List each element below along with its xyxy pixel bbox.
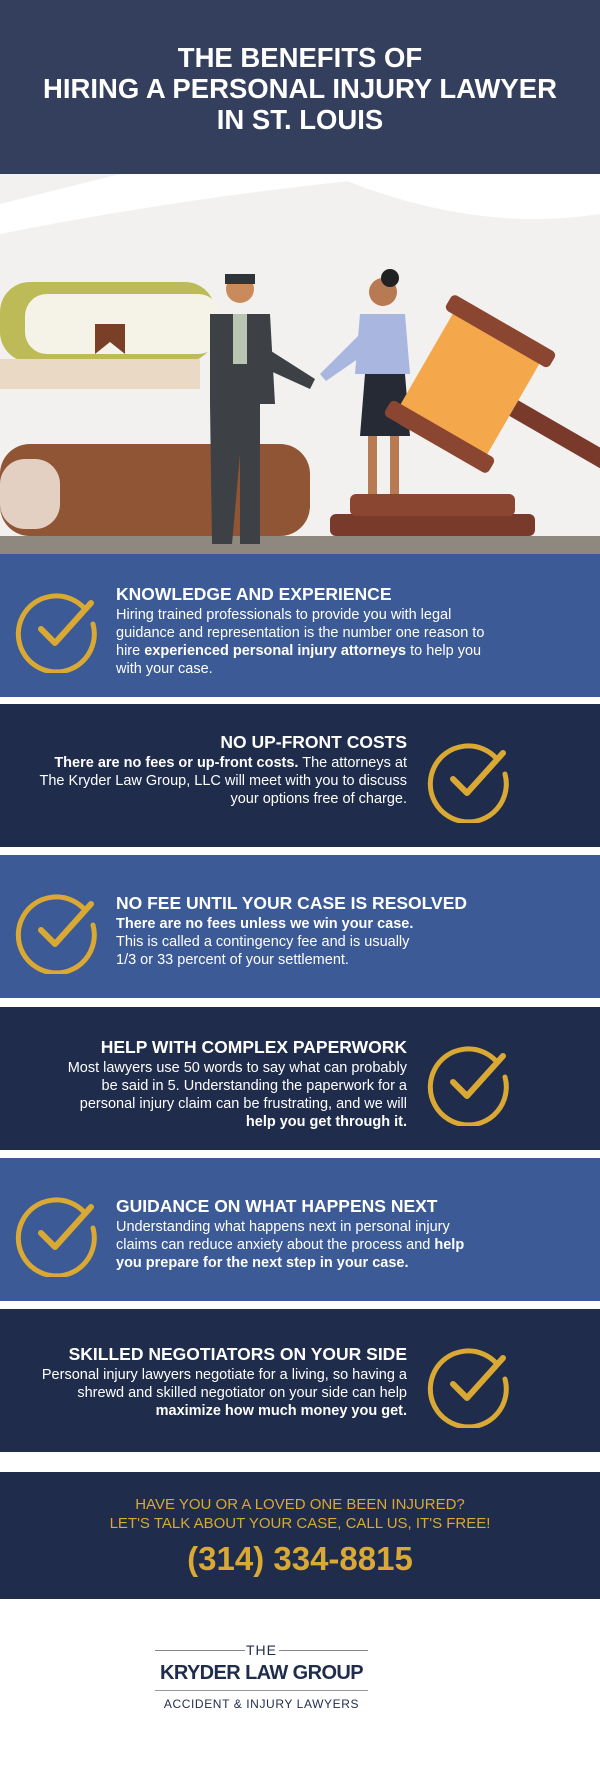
text: The Kryder Law Group, LLC will meet with you to discuss — [40, 773, 407, 789]
text: hire experienced personal injury attorneys to help you — [116, 643, 481, 659]
text: GUIDANCE ON WHAT HAPPENS NEXT — [116, 1196, 438, 1216]
businessman — [210, 274, 315, 544]
text: claims can reduce anxiety about the process and help — [116, 1237, 464, 1253]
illustration — [0, 174, 600, 554]
icon: check — [16, 593, 97, 673]
phone number: (314) 334-8815 — [187, 1540, 413, 1577]
panel: skilled negotiators — [0, 1309, 600, 1452]
panel: no up-front costs — [0, 704, 600, 847]
text — [40, 732, 407, 807]
icon: check — [16, 894, 97, 974]
panel: knowledge and experience — [0, 554, 600, 697]
text — [42, 1344, 407, 1419]
text: NO FEE UNTIL YOUR CASE IS RESOLVED — [116, 893, 467, 913]
businesswoman — [320, 269, 410, 531]
title: THE BENEFITS OF — [178, 42, 422, 73]
text: help you get through it. — [246, 1114, 407, 1130]
text: Most lawyers use 50 words to say what can probably — [68, 1060, 407, 1076]
callout: contact — [0, 1472, 600, 1599]
text: be said in 5. Understanding the paperwork for a — [102, 1078, 407, 1094]
text: you prepare for the next step in your case. — [116, 1255, 408, 1271]
cta text: LET'S TALK ABOUT YOUR CASE, CALL US, IT'S FREE! — [110, 1515, 490, 1532]
text — [116, 893, 467, 968]
text — [116, 584, 484, 677]
text: Hiring trained professionals to provide you with legal — [116, 607, 451, 623]
text: personal injury claim can be frustrating, and we will — [80, 1096, 407, 1112]
panel: complex paperwork — [0, 1007, 600, 1150]
text: Understanding what happens next in personal injury — [116, 1219, 450, 1235]
text: guidance and representation is the number one reason to — [116, 625, 484, 641]
panel: no fee until resolved — [0, 855, 600, 998]
icon: check — [16, 1197, 97, 1277]
logo: KRYDER LAW GROUP — [160, 1662, 363, 1684]
text: with your case. — [116, 661, 213, 677]
text: Personal injury lawyers negotiate for a living, so having a — [42, 1367, 407, 1383]
text: This is called a contingency fee and is usually — [116, 934, 409, 950]
text: There are no fees unless we win your case. — [116, 916, 413, 932]
text: There are no fees or up-front costs. The attorneys at — [54, 755, 407, 771]
text: your options free of charge. — [230, 791, 407, 807]
header — [0, 0, 600, 174]
text: NO UP-FRONT COSTS — [220, 732, 407, 752]
books — [0, 282, 310, 536]
logo — [155, 1642, 368, 1711]
text: SKILLED NEGOTIATORS ON YOUR SIDE — [69, 1344, 407, 1364]
cta text: HAVE YOU OR A LOVED ONE BEEN INJURED? — [135, 1496, 465, 1513]
text: KNOWLEDGE AND EXPERIENCE — [116, 584, 392, 604]
panel: guidance — [0, 1158, 600, 1301]
text: 1/3 or 33 percent of your settlement. — [116, 952, 349, 968]
text: shrewd and skilled negotiator on your side can help — [77, 1385, 407, 1401]
icon: check — [428, 1348, 509, 1428]
logo: THE — [246, 1642, 277, 1658]
cta text — [110, 1496, 490, 1532]
text — [116, 1196, 464, 1271]
logo: ACCIDENT & INJURY LAWYERS — [164, 1697, 359, 1711]
title — [43, 42, 557, 135]
icon: check — [428, 743, 509, 823]
gavel — [330, 293, 600, 536]
title: IN ST. LOUIS — [217, 104, 383, 135]
title: HIRING A PERSONAL INJURY LAWYER — [43, 73, 557, 104]
icon: check — [428, 1046, 509, 1126]
text — [68, 1037, 407, 1130]
text: maximize how much money you get. — [156, 1403, 407, 1419]
text: HELP WITH COMPLEX PAPERWORK — [101, 1037, 407, 1057]
